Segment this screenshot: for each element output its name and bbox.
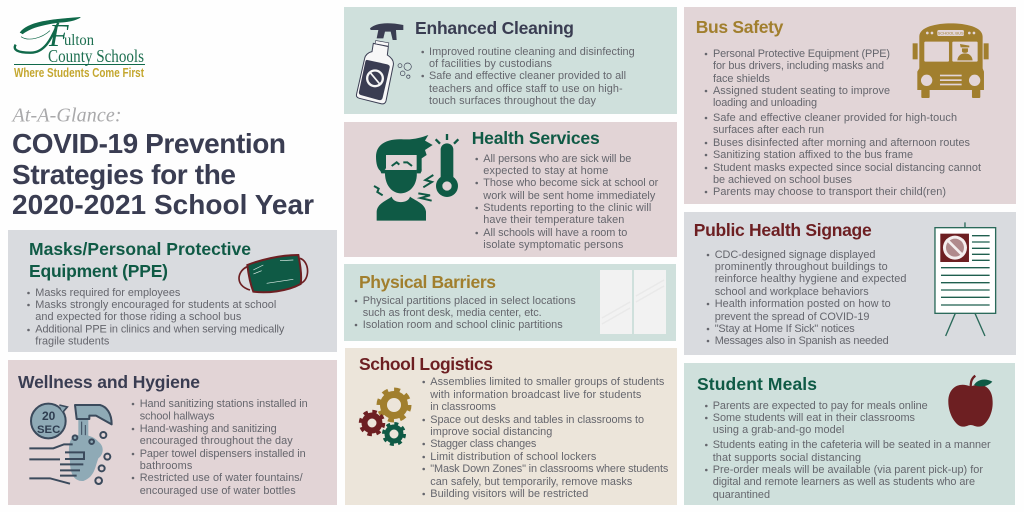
icon: hand washing: SEC [37, 424, 60, 436]
icon: hand washing: 20 [42, 409, 56, 423]
icon: sign on easel [935, 222, 996, 336]
list: masks bullets: fragile students [35, 336, 110, 348]
icon: hand washing [29, 404, 112, 484]
list: health bullets: Students reporting to the clinic will [483, 202, 651, 214]
icon: spray bottle [356, 23, 411, 104]
list: cleaning bullets: of facilities by custodians [429, 58, 553, 70]
heading: bus safety: Bus Safety [696, 17, 784, 37]
panel: health services [344, 122, 677, 257]
list: signage bullets: school and workplace behaviors [715, 286, 869, 298]
list: wellness bullets: encouraged use of water bottles [140, 485, 296, 497]
heading: physical barriers: Physical Barriers [359, 272, 496, 292]
icon: glass partitions [600, 270, 666, 334]
list: bus bullets: Personal Protective Equipment (PPE) [713, 48, 890, 60]
heading: masks [29, 239, 251, 281]
list: meals bullets: Parents are expected to pay for meals online [713, 400, 928, 412]
panel: masks and PPE [8, 230, 337, 352]
title block: COVID-19 Prevention [12, 128, 286, 159]
panel: school logistics [345, 348, 677, 505]
list: signage bullets: reinforce healthy hygiene and expected [715, 273, 906, 285]
list: health bullets: All persons who are sick will be [483, 153, 631, 165]
list: signage bullets: "Stay at Home If Sick" notices [715, 323, 855, 335]
list: cleaning bullets: teachers and office staff to use on high- [429, 83, 623, 95]
list: bus bullets [705, 48, 981, 198]
icon: gears [360, 390, 410, 444]
list: health bullets: Those who become sick at school or [483, 177, 659, 189]
list: health bullets: isolate symptomatic persons [483, 239, 624, 251]
list: barrier bullets [355, 295, 576, 331]
list: meals bullets: Some students will eat in their classrooms [713, 412, 916, 424]
panel: bus safety [684, 7, 1016, 204]
list: signage bullets [707, 249, 906, 347]
list: wellness bullets: encouraged throughout the day [140, 435, 293, 447]
list: meals bullets: using a grab-and-go model [713, 424, 844, 436]
panel: wellness and hygiene [8, 360, 337, 505]
logo: Fulton County Schools: F [48, 17, 69, 53]
list: signage bullets: prevent the spread of COVID-19 [715, 311, 869, 323]
icon: apple [948, 376, 993, 427]
list: bus bullets: for bus drivers, including masks and [713, 60, 884, 72]
heading: health services: Health Services [472, 128, 600, 148]
title block [10, 104, 314, 220]
heading: school logistics: School Logistics [359, 354, 493, 374]
list: wellness bullets: Hand sanitizing stations installed in [140, 398, 308, 410]
list: cleaning bullets: Safe and effective cleaner provided to all [429, 70, 626, 82]
list: signage bullets: CDC-designed signage displayed [715, 249, 875, 261]
panel: physical barriers [344, 264, 676, 341]
title block: Strategies for the [12, 159, 236, 190]
logo: Fulton County Schools: County Schools [48, 46, 144, 66]
list: barrier bullets: such as front desk, media center, etc. [363, 307, 542, 319]
list: bus bullets: be achieved on school buses [713, 174, 853, 186]
list: bus bullets: Parents may choose to transport their child(ren) [713, 186, 946, 198]
list: meals bullets: that supports social distancing [713, 452, 861, 464]
heading: wellness: Wellness and Hygiene [18, 372, 200, 392]
icon: sick person with thermometer [374, 134, 458, 221]
list: logistics bullets [422, 376, 669, 500]
list: logistics bullets: improve social distancing [430, 426, 552, 438]
list: wellness bullets: Paper towel dispensers installed in [140, 448, 306, 460]
list: meals bullets [705, 400, 991, 501]
list: logistics bullets: Assemblies limited to smaller groups of students [430, 376, 665, 388]
list: cleaning bullets: Improved routine cleaning and disinfecting [429, 46, 635, 58]
list: wellness bullets [132, 398, 308, 497]
list: masks bullets: and expected for those riding a school bus [35, 311, 242, 323]
list: bus bullets: Safe and effective cleaner provided for high-touch [713, 112, 957, 124]
title block: 2020-2021 School Year [12, 189, 314, 220]
icon: school bus [913, 23, 989, 98]
list: masks bullets: Additional PPE in clinics and when serving medically [35, 324, 285, 336]
list: health bullets: All schools will have a room to [483, 227, 627, 239]
list: logistics bullets: Building visitors will be restricted [430, 488, 588, 500]
list: meals bullets: quarantined [713, 489, 770, 501]
list: wellness bullets: Hand-washing and sanitizing [140, 423, 277, 435]
list: health bullets [475, 153, 659, 251]
list: logistics bullets: with information broadcast live for students [429, 389, 642, 401]
list: masks bullets [27, 287, 285, 348]
list: bus bullets: surfaces after each run [713, 124, 824, 136]
title block: At-A-Glance: [10, 104, 122, 126]
logo: Fulton County Schools [14, 17, 145, 80]
heading: student meals: Student Meals [697, 374, 817, 394]
list: meals bullets: Students eating in the cafeteria will be seated in a manner [713, 439, 991, 451]
heading: masks: Equipment (PPE) [29, 261, 168, 281]
list: bus bullets: face shields [713, 73, 771, 85]
heading: masks: Masks/Personal Protective [29, 239, 251, 259]
list: health bullets: have their temperature taken [483, 214, 624, 226]
list: bus bullets: Sanitizing station affixed to the bus frame [713, 149, 913, 161]
list: cleaning bullets [421, 46, 635, 107]
list: wellness bullets: school hallways [140, 411, 215, 423]
panel: public health signage [684, 212, 1016, 355]
list: bus bullets: Assigned student seating to improve [713, 85, 890, 97]
panel: enhanced cleaning [344, 7, 677, 114]
heading: public health signage: Public Health Signage [694, 220, 872, 240]
list: health bullets: work will be sent home immediately [482, 190, 656, 202]
list: cleaning bullets: touch surfaces throughout the day [429, 95, 597, 107]
list: health bullets: expected to stay at home [483, 165, 608, 177]
list: meals bullets: digital and remote learners as well as students who are [713, 476, 975, 488]
list: bus bullets: Buses disinfected after morning and afternoon routes [713, 137, 971, 149]
list: barrier bullets: Isolation room and school clinic partitions [363, 319, 563, 331]
heading: enhanced cleaning: Enhanced Cleaning [415, 18, 574, 38]
logo: Fulton County Schools: ulton [64, 32, 94, 49]
list: logistics bullets: Space out desks and tables in classrooms to [430, 414, 644, 426]
icon: school bus: SCHOOL BUS [938, 30, 964, 35]
list: logistics bullets: can safely, but temporarily, remove masks [430, 476, 633, 488]
list: logistics bullets: Stagger class changes [430, 438, 537, 450]
list: wellness bullets: Restricted use of water fountains/ [140, 472, 304, 484]
list: logistics bullets: "Mask Down Zones" in classrooms where students [430, 463, 669, 475]
list: signage bullets: Messages also in Spanish as needed [715, 335, 889, 347]
list: meals bullets: Pre-order meals will be available (via parent pick-up) for [713, 464, 983, 476]
list: signage bullets: Health information posted on how to [715, 298, 891, 310]
list: logistics bullets: in classrooms [430, 401, 496, 413]
list: masks bullets: Masks required for employees [35, 287, 181, 299]
panel: student meals [684, 363, 1015, 505]
list: logistics bullets: Limit distribution of school lockers [430, 451, 597, 463]
list: bus bullets: Student masks expected since social distancing cannot [713, 162, 981, 174]
list: signage bullets: prominently throughout buildings to [715, 261, 888, 273]
logo: Fulton County Schools: Where Students Come First [14, 66, 145, 80]
list: wellness bullets: bathrooms [140, 460, 193, 472]
icon: face mask [239, 255, 308, 292]
list: masks bullets: Masks strongly encouraged for students at school [35, 299, 276, 311]
list: bus bullets: loading and unloading [713, 97, 817, 109]
list: barrier bullets: Physical partitions placed in select locations [363, 295, 576, 307]
